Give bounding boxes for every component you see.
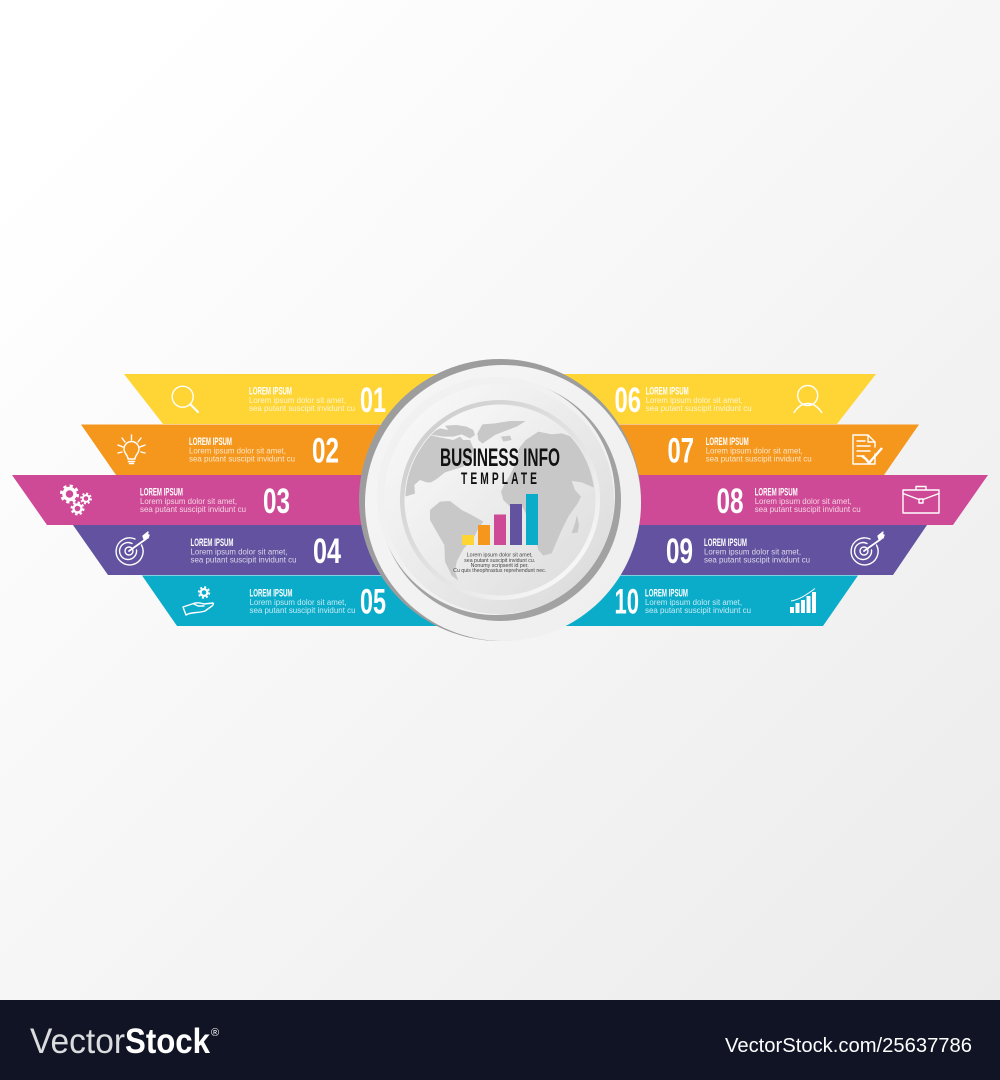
footer logo: Vector	[30, 1022, 125, 1061]
text: item 05	[250, 588, 356, 615]
band 06 yellow	[560, 374, 876, 424]
text: item 08: LOREM IPSUM	[755, 486, 798, 498]
icon: person	[794, 386, 822, 412]
footer logo	[30, 1022, 219, 1061]
number 09: 09	[666, 532, 693, 571]
text: item 01: Lorem ipsum dolor sit amet,	[249, 396, 346, 405]
text: item 09	[704, 537, 810, 564]
text: item 04: sea putant suscipit invidunt cu	[190, 556, 296, 564]
text: item 02	[189, 436, 295, 464]
text: item 03: LOREM IPSUM	[140, 486, 183, 498]
footer id: VectorStock.com/25637786	[725, 1035, 972, 1057]
text: item 07: LOREM IPSUM	[706, 436, 749, 448]
icon: gears	[61, 486, 91, 514]
text: item 08: sea putant suscipit invidunt cu	[755, 505, 861, 514]
text: item 04: Lorem ipsum dolor sit amet,	[190, 548, 288, 556]
text: item 10	[645, 588, 751, 615]
text: item 06: Lorem ipsum dolor sit amet,	[646, 396, 743, 405]
number 10: 10	[614, 582, 639, 622]
text: item 06: sea putant suscipit invidunt cu	[646, 404, 752, 413]
band 08 magenta	[600, 475, 988, 525]
text: item 05: LOREM IPSUM	[250, 588, 292, 600]
band 02 orange	[81, 424, 400, 475]
text: item 08	[755, 486, 861, 514]
text: item 02: LOREM IPSUM	[189, 436, 232, 448]
text: item 04: LOREM IPSUM	[190, 537, 234, 549]
icon: light bulb	[118, 435, 145, 464]
text: item 09: LOREM IPSUM	[704, 537, 747, 549]
number 08: 08	[716, 482, 744, 521]
number 01: 01	[360, 381, 386, 420]
world map	[405, 421, 594, 581]
band 09 purple	[600, 525, 927, 575]
number 07: 07	[668, 432, 694, 470]
text: item 07	[706, 436, 812, 464]
footer bar	[0, 1000, 1000, 1080]
band 10 cyan	[560, 576, 858, 626]
icon: target	[116, 532, 149, 565]
text: item 09: sea putant suscipit invidunt cu	[704, 556, 810, 564]
footer logo: Stock	[125, 1022, 210, 1061]
center paragraph	[453, 552, 546, 574]
text: item 10: LOREM IPSUM	[645, 588, 688, 600]
icon: briefcase	[903, 486, 939, 513]
text: item 08: Lorem ipsum dolor sit amet,	[755, 497, 852, 506]
text: item 02: sea putant suscipit invidunt cu	[189, 454, 295, 464]
text: item 01	[249, 386, 355, 413]
text: item 06	[646, 386, 752, 413]
text: item 02: Lorem ipsum dolor sit amet,	[189, 446, 286, 456]
text: item 01: sea putant suscipit invidunt cu	[249, 404, 355, 413]
text: item 03: sea putant suscipit invidunt cu	[140, 505, 246, 514]
center paragraph: Cu quis theophrastus reprehendunt nec.	[453, 568, 546, 574]
center paragraph: sea putant suscipit invidunt cu.	[464, 558, 535, 564]
text: item 05: Lorem ipsum dolor sit amet,	[250, 598, 346, 607]
center badge	[359, 359, 641, 641]
text: item 09: Lorem ipsum dolor sit amet,	[704, 548, 801, 556]
band 05 cyan	[142, 576, 440, 626]
text: item 01: LOREM IPSUM	[249, 386, 292, 398]
text: item 10: Lorem ipsum dolor sit amet,	[645, 598, 742, 607]
icon: hand with gear	[183, 587, 213, 615]
number 02: 02	[312, 432, 339, 470]
band 07 orange	[600, 424, 919, 475]
center paragraph: Nonumy scripserit id per.	[471, 563, 529, 569]
text: item 03: Lorem ipsum dolor sit amet,	[140, 497, 237, 506]
number 05: 05	[360, 582, 386, 622]
footer logo: ®	[211, 1027, 219, 1039]
text: item 07: Lorem ipsum dolor sit amet,	[706, 446, 803, 456]
title: BUSINESS INFO	[440, 444, 560, 472]
icon: document with check	[853, 435, 882, 464]
icon: target	[851, 532, 884, 565]
text: item 05: sea putant suscipit invidunt cu	[250, 606, 356, 615]
icon: growth chart	[790, 588, 816, 613]
number 03: 03	[263, 482, 290, 521]
text: item 10: sea putant suscipit invidunt cu	[645, 606, 751, 615]
text: item 07: sea putant suscipit invidunt cu	[706, 454, 812, 464]
number 04: 04	[313, 532, 341, 571]
subtitle: TEMPLATE	[461, 468, 540, 488]
bar chart	[462, 494, 538, 545]
text: item 04	[190, 537, 296, 564]
band 03 magenta	[12, 475, 400, 525]
text: item 03	[140, 486, 246, 514]
center paragraph: Lorem ipsum dolor sit amet,	[467, 552, 533, 558]
number 06: 06	[614, 381, 641, 420]
text: item 06: LOREM IPSUM	[646, 386, 689, 398]
icon: magnifier	[172, 386, 198, 412]
band 04 purple	[73, 525, 400, 575]
band 01 yellow	[124, 374, 440, 424]
